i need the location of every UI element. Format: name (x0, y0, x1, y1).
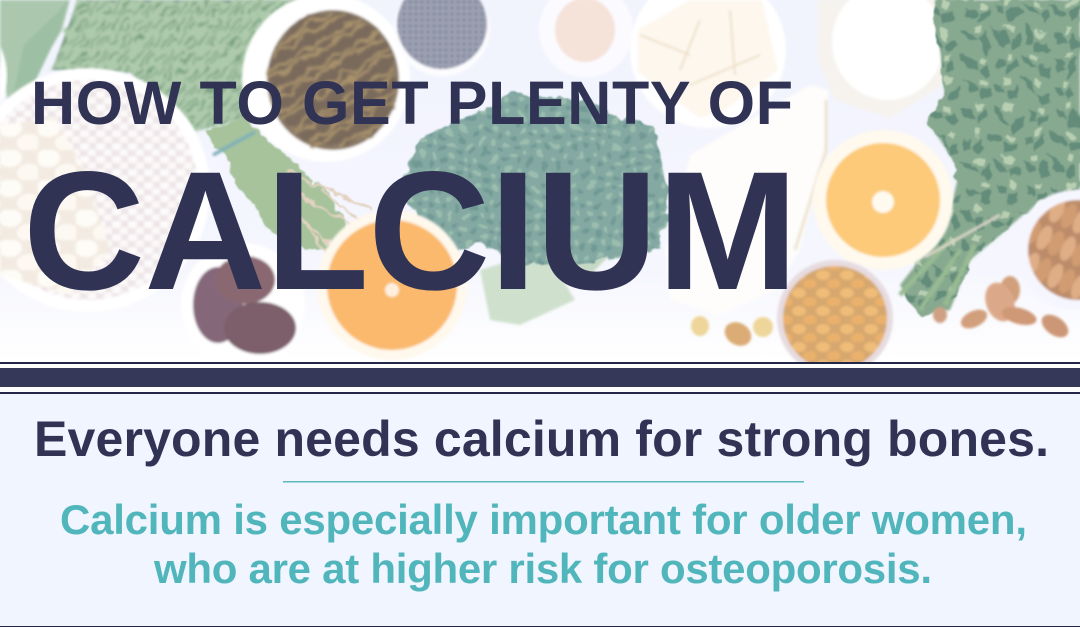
half orange, right (813, 130, 953, 270)
title: how to get plenty of: HOW TO GET PLENTY OF (31, 69, 793, 137)
bottom rule (0, 626, 1080, 627)
parsley (900, 0, 1080, 315)
loose raisins (691, 316, 773, 351)
bowl of tofu (630, 0, 786, 128)
bowl of seaweed (242, 0, 410, 162)
bowl of golden raisins (777, 260, 893, 376)
lower panel (0, 393, 1080, 626)
bowl of almonds (1015, 190, 1080, 310)
teal divider (283, 481, 804, 482)
half orange, lower centre (317, 210, 467, 360)
teal text line 2: who are at higher risk for osteoporosis. (153, 545, 932, 592)
bowl of white beans (0, 68, 210, 312)
wedge of cheese (665, 85, 828, 315)
title: calcium: CALCIUM (23, 136, 798, 325)
bowl of poppy seeds (394, 0, 490, 76)
creamer jug (539, 0, 633, 77)
bowl of dates (181, 243, 305, 367)
leafy greens top left (0, 0, 300, 130)
triple rule band (0, 362, 1080, 394)
glass of milk (818, 0, 945, 118)
subheading: Everyone needs calcium for strong bones. (34, 411, 1049, 467)
broccoli (400, 95, 668, 325)
green onion stems and roots (205, 118, 372, 265)
scattered almonds (933, 276, 1072, 342)
food photo banner (0, 0, 1080, 376)
teal text line 1: Calcium is especially important for older women, (60, 496, 1027, 543)
white dish at left edge (0, 46, 7, 105)
